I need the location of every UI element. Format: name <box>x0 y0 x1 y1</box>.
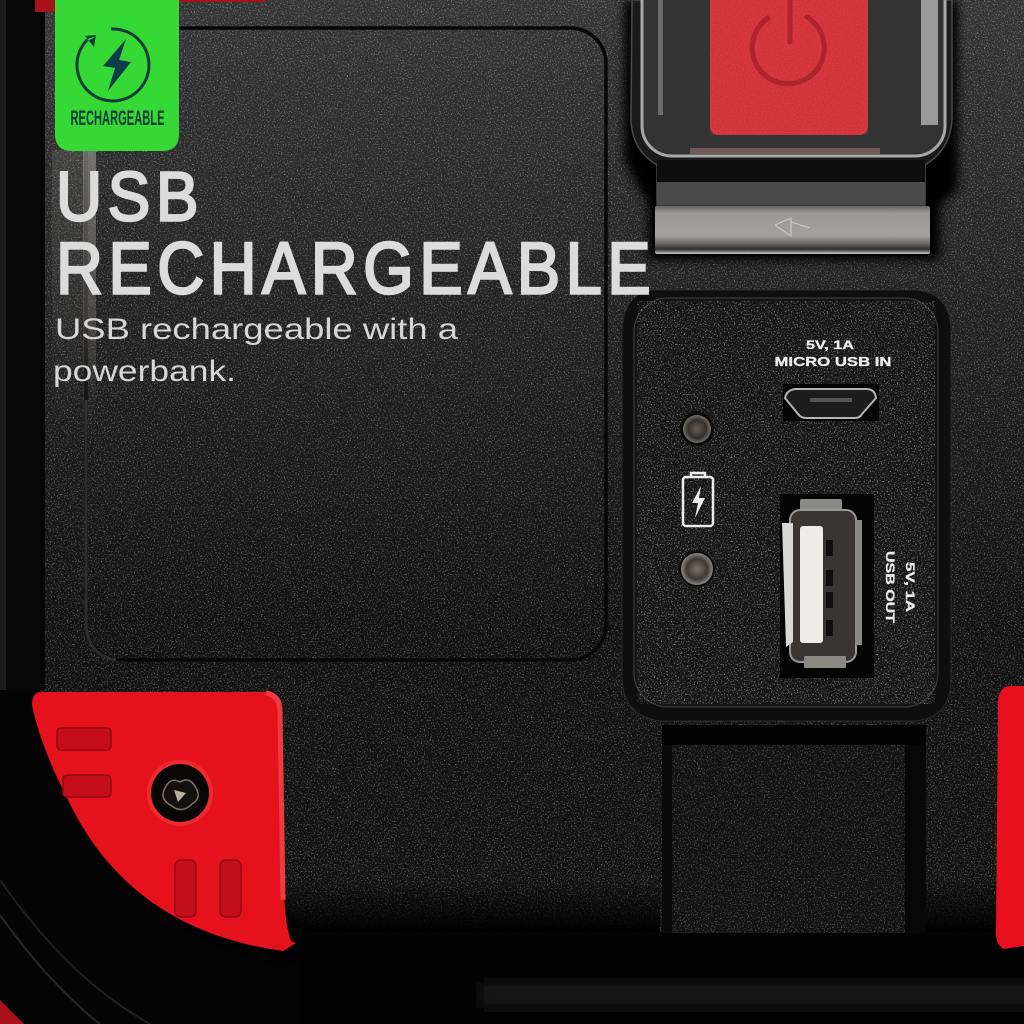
top red edge slivers <box>35 0 265 12</box>
micro usb label: MICRO USB IN <box>774 355 892 369</box>
recharge icon <box>77 29 149 101</box>
panel outer housing <box>622 290 951 721</box>
lower LED <box>679 551 715 587</box>
tab lower surface <box>657 182 925 205</box>
dark recess below port panel <box>662 725 926 933</box>
circular arrow <box>77 29 149 101</box>
description text: powerbank. <box>53 355 236 388</box>
panel face <box>634 298 938 707</box>
badge label: RECHARGEABLE <box>70 107 164 130</box>
micro usb label: 5V, 1A <box>806 338 854 352</box>
battery icon <box>683 473 713 526</box>
description text: USB rechargeable with a <box>55 313 458 346</box>
port tongue <box>800 526 823 643</box>
title <box>56 158 656 310</box>
lightning bolt <box>103 39 131 91</box>
light vertical streak on panel edge <box>83 150 96 440</box>
upper LED <box>680 412 714 446</box>
bracket edge highlight <box>266 693 283 900</box>
clear cover tab <box>631 0 952 205</box>
badge background <box>55 0 179 151</box>
port bottom clip <box>804 656 846 668</box>
title: USB <box>56 158 204 236</box>
port right metal <box>855 520 862 645</box>
clear lid window <box>642 0 945 156</box>
red corner bracket right <box>996 686 1024 949</box>
latch arrow mark <box>775 218 810 236</box>
bottom-left red sliver <box>0 1000 24 1024</box>
dark left edge channel <box>0 0 45 690</box>
title: RECHARGEABLE <box>56 228 656 310</box>
bracket shadow <box>60 760 300 960</box>
red power button <box>710 0 868 135</box>
port panel <box>622 290 951 721</box>
bracket screw <box>147 760 213 826</box>
bracket slot holes <box>57 728 241 917</box>
metal latch strip <box>655 206 930 254</box>
port contacts <box>826 540 833 636</box>
lid right reflection <box>921 0 938 125</box>
description text <box>53 313 458 388</box>
bracket body <box>32 692 296 951</box>
dark lower band and housing curve <box>0 690 1024 1024</box>
power symbol <box>752 0 824 84</box>
power button assembly <box>624 0 958 260</box>
shadow around button cover <box>624 0 958 260</box>
red corner bracket left <box>32 692 300 960</box>
usb out label <box>883 551 917 624</box>
port left metal <box>782 523 793 647</box>
port shell top clip <box>800 499 842 513</box>
micro usb label <box>774 338 892 369</box>
usb out label: 5V, 1A <box>903 562 917 612</box>
usb out label: USB OUT <box>883 551 897 624</box>
rechargeable badge <box>55 0 179 151</box>
usb a port <box>780 494 874 678</box>
recessed panel outline <box>52 28 606 660</box>
port shell <box>790 510 856 662</box>
micro usb port <box>783 384 879 421</box>
